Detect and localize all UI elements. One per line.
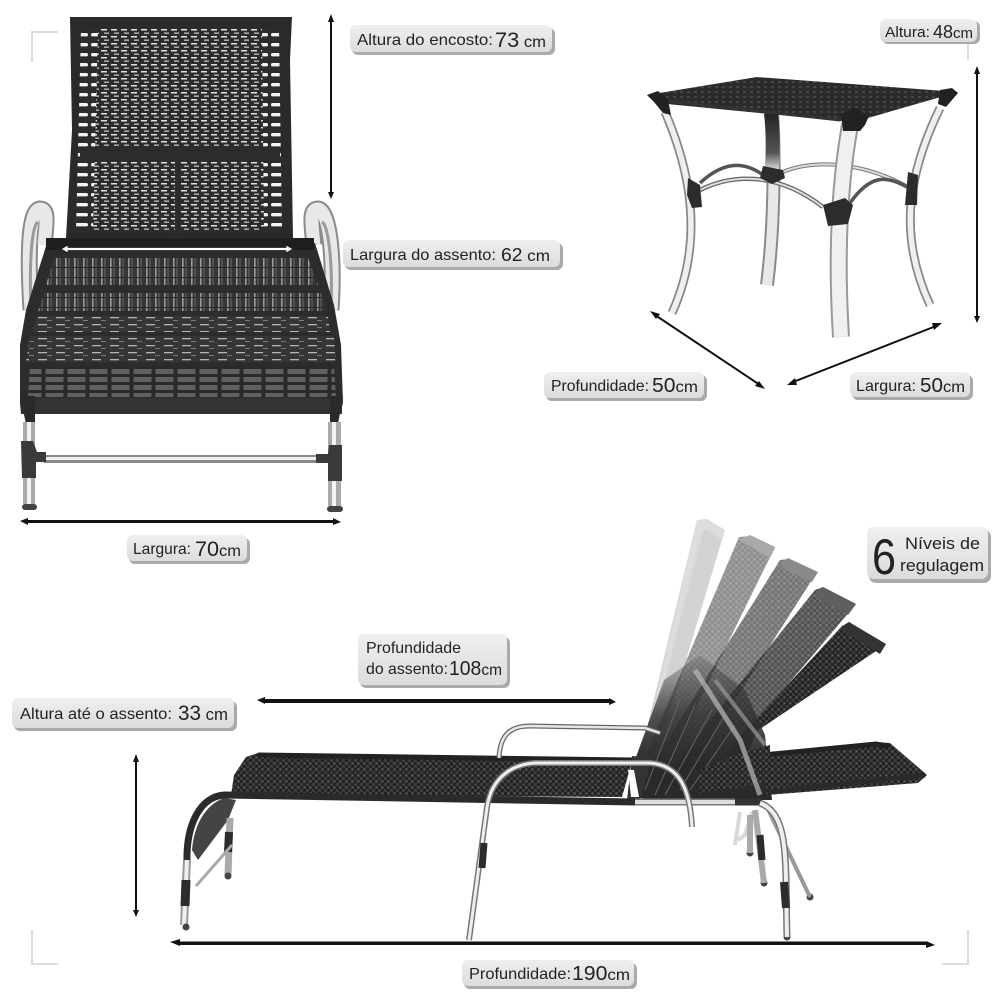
seat frame (187, 795, 762, 862)
arrow: seat depth (257, 697, 616, 705)
legs (21, 422, 343, 512)
label: table depth: 50cm (652, 375, 698, 397)
label: backrest height (350, 25, 555, 55)
label: chair width (127, 535, 250, 564)
armrests (29, 209, 332, 310)
arrow: table depth (650, 311, 765, 389)
label: seat height: 33 cm (178, 702, 228, 725)
label: seat width (343, 240, 563, 270)
seat corner wraps (20, 396, 35, 424)
label: seat depth: 108cm (449, 658, 502, 680)
label: chair width: Largura: (133, 541, 191, 558)
label: chair width: 70cm (195, 538, 241, 561)
hinge clutter (735, 812, 752, 845)
arrow: seat height (133, 754, 139, 917)
table top (647, 77, 958, 121)
label: table height: 48cm (933, 22, 973, 42)
arrow: chair width (20, 518, 341, 525)
label: backrest height: 73 cm (495, 29, 546, 52)
label: six levels: 6 (872, 529, 896, 585)
backrest base strings (636, 655, 772, 800)
label: total depth (462, 960, 637, 989)
label: six levels: Níveis de (905, 534, 980, 553)
armrests and rear legs (469, 726, 810, 940)
lounge chair side view (182, 519, 927, 940)
lounge chair front view (20, 17, 343, 512)
label: seat depth: do assento: (366, 661, 448, 678)
label: six levels (867, 527, 991, 585)
arrow: backrest height (328, 14, 334, 199)
label: total depth: Profundidade: (469, 966, 571, 983)
flat backrest (762, 742, 927, 795)
foot caps (182, 850, 814, 940)
arrow: table width (787, 323, 942, 385)
label: table depth: Profundidade: (551, 378, 649, 395)
footrest underside (192, 798, 236, 860)
reclined backrest positions (640, 519, 886, 780)
label: seat height: Altura até o assento: (20, 706, 172, 723)
side table (647, 77, 958, 337)
arrow: table height (974, 66, 980, 323)
mechanism struts (695, 670, 765, 795)
label: table depth (544, 372, 707, 401)
front legs (184, 818, 232, 925)
table legs (665, 108, 940, 337)
label: table height (880, 19, 980, 44)
label: seat width: 62 cm (501, 245, 550, 265)
label: backrest height: Altura do encosto: (357, 32, 493, 49)
arrow: total depth (170, 939, 935, 948)
label: table height: Altura: (885, 24, 930, 41)
label: six levels: regulagem (900, 556, 984, 575)
label: seat depth: Profundidade (366, 640, 461, 657)
label: seat depth (358, 634, 510, 688)
label: seat width: Largura do assento: (350, 247, 496, 264)
label: table width: Largura: (856, 378, 916, 395)
backrest (66, 17, 293, 238)
label: total depth: 190cm (572, 963, 630, 985)
label: table width: 50cm (920, 375, 965, 397)
seat (20, 243, 343, 414)
label: seat height (12, 698, 237, 731)
arrow: seat width (white) (61, 245, 293, 253)
table joints (687, 166, 918, 226)
label: table width (850, 372, 973, 400)
seat (231, 753, 633, 797)
